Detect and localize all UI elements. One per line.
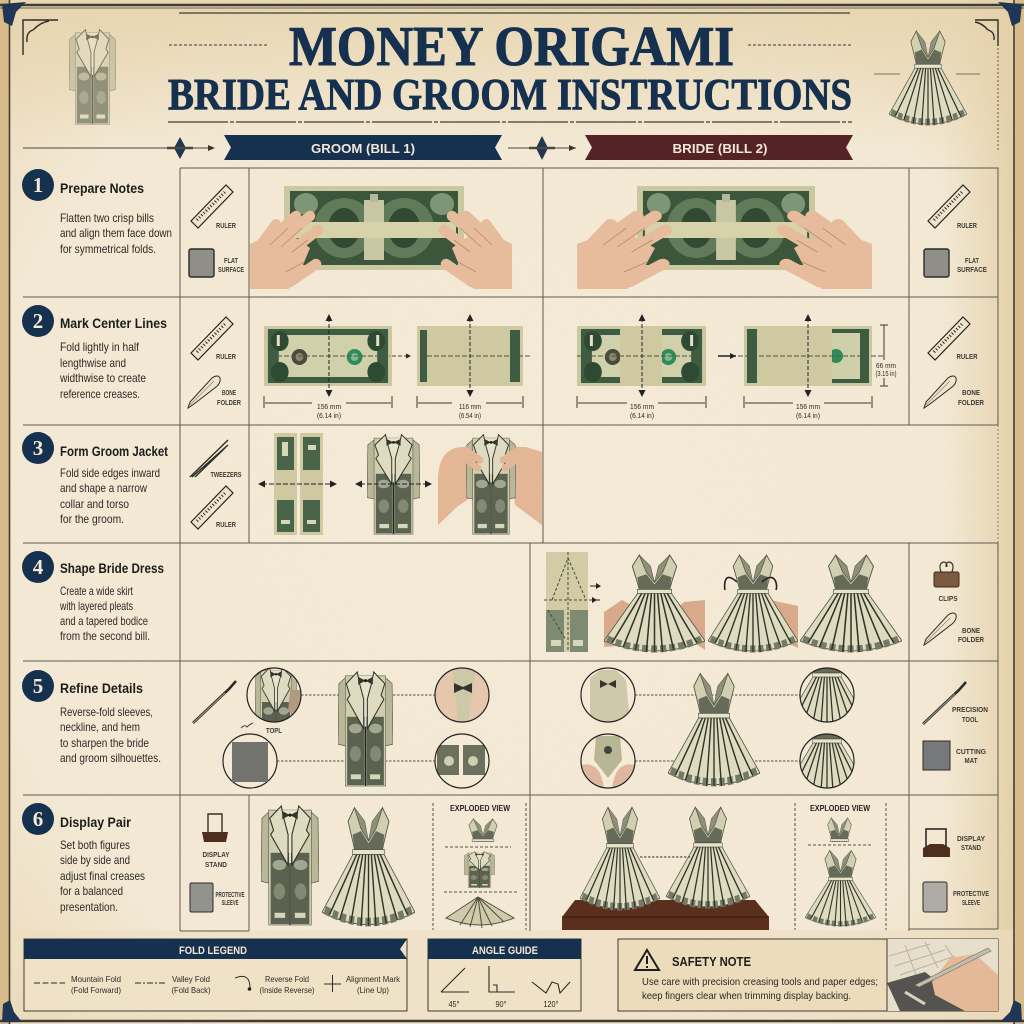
illustration: groom and bride side by side xyxy=(261,806,415,926)
step 4 text xyxy=(22,551,164,643)
exploded view: groom: EXPLODED VIEW xyxy=(450,803,511,813)
legend: valley fold: (Fold Back) xyxy=(172,985,211,995)
tools: step 6 bride: PROTECTIVE xyxy=(953,889,989,898)
step 2 text: reference creases. xyxy=(60,387,140,401)
tools: step 1 bride: FLAT xyxy=(965,256,979,265)
header: bride dress sketch icon xyxy=(874,31,980,125)
title line 2: BRIDE AND GROOM INSTRUCTIONS xyxy=(168,70,852,119)
step 4 text: Shape Bride Dress xyxy=(60,561,164,576)
dimension: height of bill xyxy=(876,325,896,386)
step 6 text: presentation. xyxy=(60,900,118,914)
tools: step 3 groom: RULER xyxy=(216,520,236,529)
step 3 text: Form Groom Jacket xyxy=(60,444,168,459)
illustration: bride dress waist shaping with arrows xyxy=(708,555,798,652)
tools: step 5 bride: TOOL xyxy=(962,715,978,724)
outline: neckline callout ring xyxy=(581,734,635,788)
step 3 text: 3 xyxy=(33,436,43,460)
legend: reverse fold: (Inside Reverse) xyxy=(260,985,315,995)
step 4 text: from the second bill. xyxy=(60,629,150,643)
callout: lower pleats detail xyxy=(800,734,854,788)
callout: neckline pinch detail xyxy=(581,734,635,788)
dimension: width of folded bill: 116 mm xyxy=(459,404,481,411)
dimension: height of bill: 66 mm xyxy=(876,363,896,370)
tools: step 2 bride: RULER xyxy=(956,352,978,361)
panel: angle guide xyxy=(428,939,581,1011)
banner: bride xyxy=(585,135,853,160)
banner: groom: GROOM (BILL 1) xyxy=(311,142,415,156)
header: groom jacket sketch icon xyxy=(69,30,116,124)
image: groom flattening bill with hands xyxy=(250,186,512,290)
step 5 text xyxy=(22,670,161,765)
dimension: width of folded bill: (6.54 in) xyxy=(459,413,481,420)
tools: step 1 bride: RULER xyxy=(957,221,977,230)
step 1 text: and align them face down xyxy=(60,226,172,240)
step 6 text: Display Pair xyxy=(60,815,132,830)
tools: step 1 groom xyxy=(189,185,244,277)
tools: step 6 groom: SLEEVE xyxy=(222,898,238,907)
image: hand with precision tool on mat xyxy=(887,939,998,1011)
legend: mountain fold: (Fold Forward) xyxy=(71,985,121,995)
step 5 text: neckline, and hem xyxy=(60,720,140,734)
step 3 text: collar and torso xyxy=(60,497,129,511)
diagram: groom center creases xyxy=(264,314,530,420)
tools: step 1 bride xyxy=(924,185,987,277)
outline: collar callout ring xyxy=(247,668,301,722)
step 3 text: Fold side edges inward xyxy=(60,466,160,480)
tools: step 6 groom: STAND xyxy=(205,860,228,869)
panel: safety note: keep fingers clear when trimming display backing. xyxy=(642,990,851,1002)
step 4 text: Create a wide skirt xyxy=(60,584,133,598)
tools: step 5 bride: MAT xyxy=(964,756,978,765)
callout: cutting grid detail xyxy=(223,734,277,788)
step 6 text: for a balanced xyxy=(60,884,123,898)
panel: angle guide: ANGLE GUIDE xyxy=(472,945,538,957)
panel: safety note xyxy=(618,939,998,1011)
illustration: bride dress pleating with both hands xyxy=(604,555,705,652)
tools: step 6 bride: STAND xyxy=(961,843,981,852)
tools: step 6 bride: DISPLAY xyxy=(957,834,985,843)
title line 1: MONEY ORIGAMI xyxy=(289,16,734,78)
callout: bodice detail xyxy=(590,670,629,722)
tools: step 4 bride: BONE xyxy=(962,626,980,635)
panel: angle guide: 90° xyxy=(496,999,506,1009)
panel: fold legend xyxy=(24,939,407,1011)
outline: upper pleats ring xyxy=(800,668,854,722)
dimension: width of flat bill: 156 mm xyxy=(630,404,654,411)
dimension: width of folded bill xyxy=(744,396,872,420)
step 1 text: Prepare Notes xyxy=(60,181,144,196)
tools: step 2 groom: RULER xyxy=(216,352,236,361)
callout: jacket collar detail xyxy=(255,668,300,722)
step 2 text: Fold lightly in half xyxy=(60,340,140,354)
diagram: bride crease pattern xyxy=(544,552,601,652)
step 5 bride: detail callouts xyxy=(580,667,855,789)
tools: step 5 bride: PRECISION xyxy=(952,705,988,714)
legend: reverse fold xyxy=(235,974,315,995)
diagram: groom jacket folds xyxy=(258,433,542,535)
tools: step 3 groom xyxy=(190,440,242,529)
step 3 text xyxy=(22,432,168,526)
outline: hem callout ring xyxy=(435,734,489,788)
tools: step 6 bride: SLEEVE xyxy=(962,898,980,907)
tools: step 5 bride xyxy=(923,682,988,770)
step 5 text: to sharpen the bride xyxy=(60,736,149,750)
tools: step 2 groom: FOLDER xyxy=(217,398,241,407)
outline: lower pleats ring xyxy=(800,734,854,788)
tools: step 2 bride xyxy=(924,317,984,408)
dimension: width of folded bill xyxy=(417,396,523,420)
dimension: width of folded bill: (6.14 in) xyxy=(796,413,820,420)
step 5 text: and groom silhouettes. xyxy=(60,751,161,765)
dimension: width of flat bill: (6.14 in) xyxy=(317,413,341,420)
image: hands shaping jacket xyxy=(438,435,542,534)
legend: reverse fold: Reverse Fold xyxy=(265,974,309,984)
step 5 text: 5 xyxy=(33,674,43,698)
panel: angle guide: 120° xyxy=(544,999,558,1009)
section rule with ornaments xyxy=(23,136,576,160)
tools: step 6 groom xyxy=(190,814,244,912)
title block xyxy=(168,13,852,122)
exploded view: groom xyxy=(433,803,526,930)
banner: bride: BRIDE (BILL 2) xyxy=(672,142,768,156)
step 4 text: and a tapered bodice xyxy=(60,614,148,628)
callout: upper pleats detail xyxy=(800,668,854,722)
diagram: bride center creases xyxy=(577,314,896,420)
tools: step 6 bride xyxy=(923,829,989,912)
tools: step 2 groom xyxy=(188,317,241,408)
legend: valley fold xyxy=(135,974,211,995)
callout: hem detail xyxy=(437,745,485,775)
step 2 text: widthwise to create xyxy=(59,371,146,385)
outline: bodice callout ring xyxy=(581,668,635,722)
illustration: pair on wooden display stand xyxy=(562,807,769,930)
panel: safety note: SAFETY NOTE xyxy=(672,954,751,969)
step 2 text: lengthwise and xyxy=(60,356,126,370)
tools: step 5 bride: CUTTING xyxy=(956,747,986,756)
step 1 text xyxy=(22,169,172,256)
tools: step 6 groom: PROTECTIVE xyxy=(216,890,244,899)
dimension: width of flat bill xyxy=(264,396,392,420)
legend: alignment mark xyxy=(324,974,401,995)
step 2 text xyxy=(22,305,167,401)
tools: step 2 groom: BONE xyxy=(222,388,236,397)
step 6 text: Set both figures xyxy=(60,838,130,852)
dimension: width of flat bill xyxy=(577,396,706,420)
tools: step 2 bride: FOLDER xyxy=(958,398,984,407)
tools: step 4 bride xyxy=(924,562,984,645)
tools: step 6 groom: DISPLAY xyxy=(202,850,230,859)
panel: safety note: Use care with precision creasing tools and paper edges; xyxy=(642,976,878,988)
outline: bow tie callout ring xyxy=(435,668,489,722)
dimension: width of folded bill: 156 mm xyxy=(796,404,820,411)
dimension: width of flat bill: 156 mm xyxy=(317,404,341,411)
step 1 text: 1 xyxy=(33,173,43,197)
exploded view: bride xyxy=(795,803,886,930)
step 2 text: Mark Center Lines xyxy=(60,316,167,331)
tools: step 4 bride: FOLDER xyxy=(958,635,984,644)
step 5 text: Refine Details xyxy=(60,681,143,696)
legend: mountain fold xyxy=(34,974,121,995)
banner: groom xyxy=(224,135,502,160)
step 6 text: side by side and xyxy=(60,853,130,867)
exploded view: bride: EXPLODED VIEW xyxy=(810,803,871,813)
panel: angle guide: 45° xyxy=(448,999,460,1009)
step 1 text: for symmetrical folds. xyxy=(60,242,156,256)
step 4 text: 4 xyxy=(33,555,44,579)
step 2 text: 2 xyxy=(33,309,43,333)
step 6 text xyxy=(22,803,145,914)
callout: bow tie pinch detail xyxy=(435,668,489,722)
step 5 groom: tools and detail callouts: TOPL xyxy=(266,726,282,735)
table grid lines xyxy=(23,168,998,931)
step 4 text: with layered pleats xyxy=(59,599,133,613)
tools: step 1 groom: FLAT xyxy=(224,256,238,265)
tools: step 4 bride: CLIPS xyxy=(938,594,958,603)
legend: alignment mark: Alignment Mark xyxy=(346,974,401,984)
tools: step 1 groom: RULER xyxy=(216,221,236,230)
step 5 text: Reverse-fold sleeves, xyxy=(60,705,153,719)
icon: warning triangle xyxy=(635,950,659,970)
panel: fold legend: FOLD LEGEND xyxy=(179,945,247,957)
image: bride flattening bill with hands xyxy=(577,186,872,290)
step 1 text: Flatten two crisp bills xyxy=(60,211,154,225)
legend: alignment mark: (Line Up) xyxy=(357,985,389,995)
step 3 text: and shape a narrow xyxy=(60,481,147,495)
jacket after refinement xyxy=(338,672,393,786)
tools: step 3 groom: TWEEZERS xyxy=(210,470,242,479)
bride dress after refinement xyxy=(668,674,760,786)
legend: mountain fold: Mountain Fold xyxy=(71,974,121,984)
legend: valley fold: Valley Fold xyxy=(172,974,210,984)
step 6 text: 6 xyxy=(33,807,43,831)
step 5 groom: tools and detail callouts xyxy=(193,668,489,788)
step 6 text: adjust final creases xyxy=(60,869,145,883)
dimension: width of flat bill: (6.14 in) xyxy=(630,413,654,420)
tools: step 1 groom: SURFACE xyxy=(218,265,244,274)
step 3 text: for the groom. xyxy=(60,512,124,526)
illustration: finished bride dress xyxy=(800,555,902,652)
dimension: height of bill: (3.15 in) xyxy=(876,371,896,378)
tools: step 2 bride: BONE xyxy=(962,388,980,397)
tools: step 1 bride: SURFACE xyxy=(957,265,987,274)
